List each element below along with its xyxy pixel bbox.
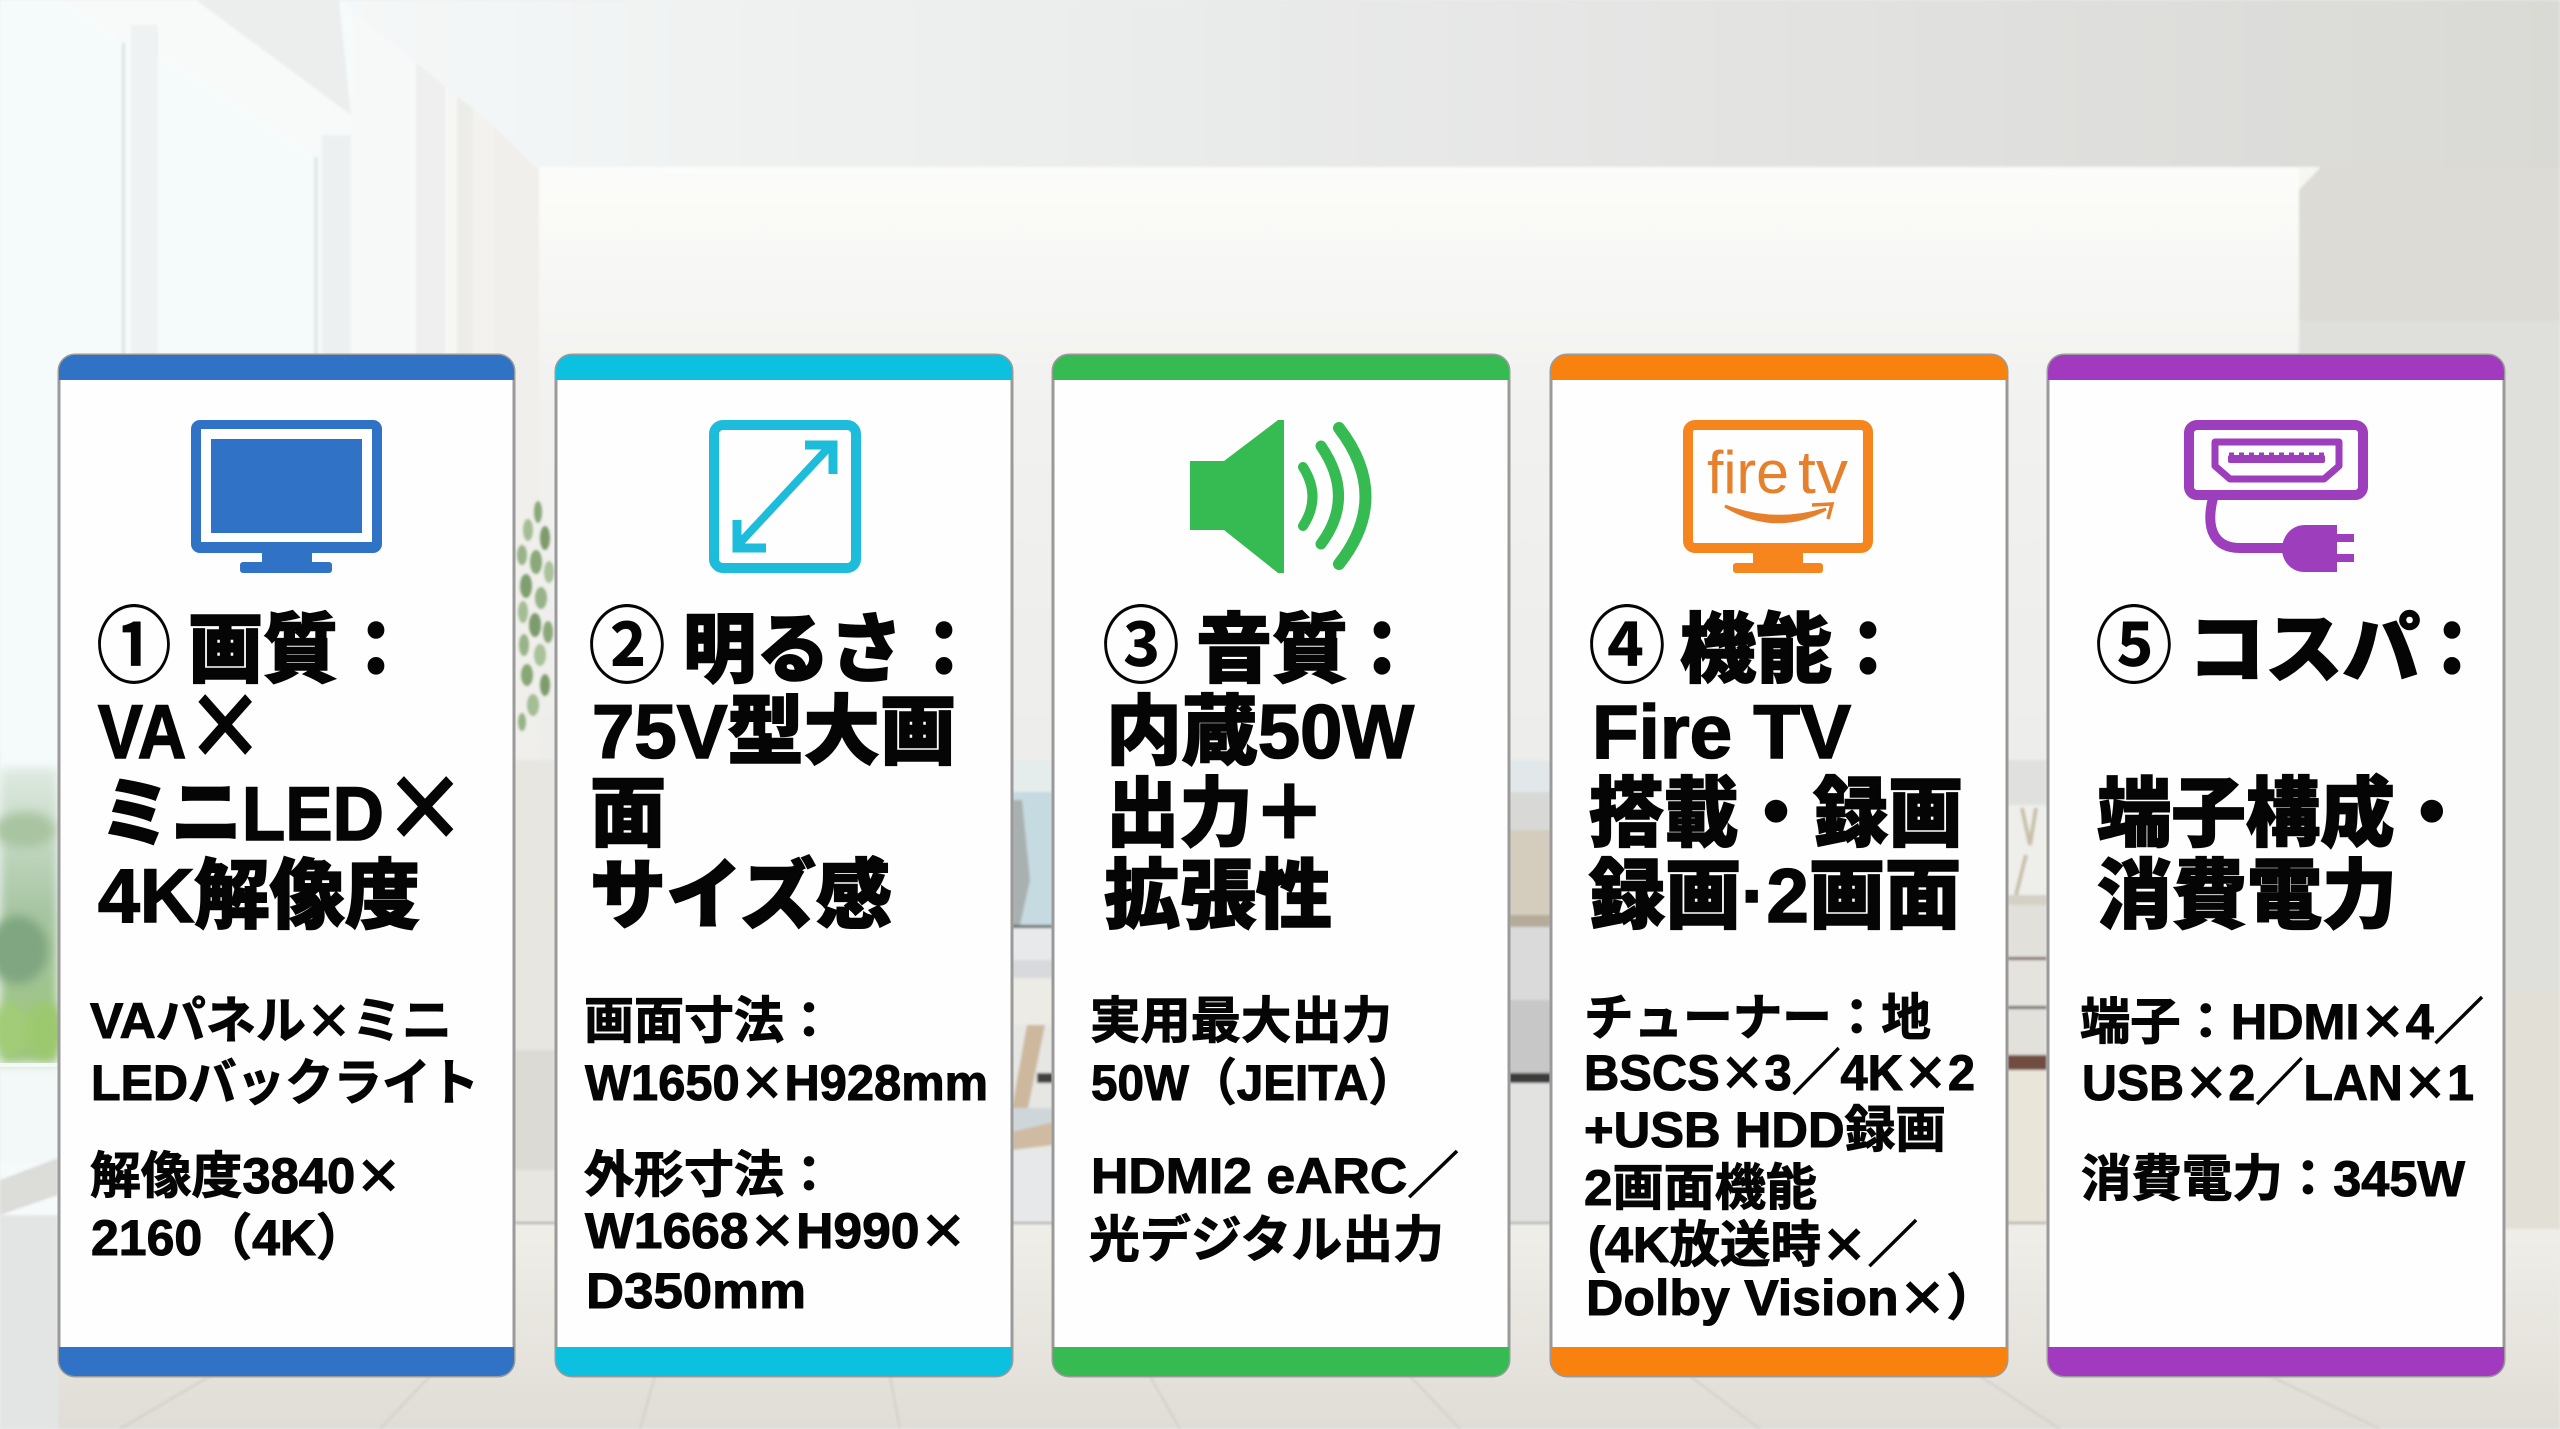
heading [588, 600, 980, 939]
header bar [1551, 355, 2007, 380]
heading: サイズ感 [590, 854, 892, 939]
icon: hdmi port and plug [2189, 425, 2363, 572]
footer bar [59, 1347, 514, 1376]
heading: 機能 [1680, 608, 1832, 693]
heading: 端子構成・ [2097, 772, 2469, 857]
body text [1584, 990, 1998, 1329]
icon: fire tv monitor [1688, 425, 1868, 573]
heading: 拡張性 [1104, 854, 1332, 939]
body text [584, 993, 988, 1319]
body text: Dolby Vision×） [1586, 1263, 1998, 1329]
heading: コスパ [2188, 608, 2420, 693]
body text: HDMI2 eARC／ [1091, 1148, 1459, 1204]
heading: 内蔵50W [1106, 690, 1414, 775]
heading: 音質 [1196, 608, 1348, 693]
heading: 明るさ [683, 608, 903, 693]
heading: VA× [98, 657, 264, 784]
body text: VAパネル×ミニ [90, 986, 452, 1052]
panel: 5 value [2048, 355, 2504, 1376]
panel: 2 brightness [556, 355, 1012, 1376]
heading: 75V型大画 [592, 690, 956, 775]
heading: ミニLED× [100, 739, 466, 866]
header bar [2048, 355, 2504, 380]
body text: 2160（4K） [91, 1210, 366, 1266]
body text [1089, 993, 1459, 1268]
heading: ： [2416, 608, 2488, 693]
heading: 4K解像度 [98, 854, 420, 939]
tree outside the window [0, 768, 65, 1067]
panel: 4 features [1551, 355, 2007, 1376]
body text: 2画面機能 [1584, 1160, 1817, 1216]
header bar [556, 355, 1012, 380]
body text: D350mm [586, 1263, 806, 1319]
heading: ： [1832, 608, 1904, 693]
body text: W1650×H928mm [585, 1048, 988, 1114]
footer bar [2048, 1347, 2504, 1376]
heading [1102, 600, 1418, 939]
heading: ② [588, 600, 666, 694]
panel: 3 sound [1053, 355, 1509, 1376]
body text: LEDバックライト [91, 1055, 479, 1111]
body text: 消費電力：345W [2081, 1151, 2466, 1207]
heading: 消費電力 [2097, 854, 2397, 939]
body text: 画面寸法： [584, 993, 834, 1049]
body text: W1668×H990× [585, 1196, 967, 1262]
heading [96, 600, 466, 939]
icon: fire tv monitor: tv [1798, 439, 1848, 506]
heading: ③ [1102, 600, 1180, 694]
body text [2080, 987, 2484, 1207]
heading: 録画·2画面 [1589, 854, 1961, 939]
body text: (4K放送時×／ [1588, 1210, 1918, 1276]
heading: ④ [1588, 600, 1666, 694]
footer bar [556, 1347, 1012, 1376]
body text: 外形寸法： [584, 1147, 834, 1203]
body text: BSCS×3／4K×2 [1584, 1038, 1975, 1104]
icon: fire tv monitor: fire [1707, 439, 1789, 506]
panel: 1 picture quality [59, 355, 514, 1376]
heading: ⑤ [2095, 600, 2173, 694]
icon: monitor [191, 420, 382, 573]
body text: 端子：HDMI×4／ [2080, 987, 2484, 1053]
icon: diagonal size arrow [714, 425, 856, 568]
body text: 光デジタル出力 [1089, 1212, 1444, 1268]
footer bar [1551, 1347, 2007, 1376]
heading: ： [1346, 608, 1418, 693]
icon: speaker [1190, 420, 1366, 573]
heading: Fire TV [1592, 690, 1851, 775]
heading: ： [908, 608, 980, 693]
heading: ： [340, 608, 412, 693]
body text: 解像度3840× [90, 1141, 402, 1207]
plant between cards 1 and 2 [517, 501, 554, 731]
body text: 実用最大出力 [1090, 993, 1392, 1049]
body text: 50W（JEITA） [1091, 1055, 1416, 1111]
heading: ① [96, 600, 172, 694]
footer bar [1053, 1347, 1509, 1376]
body text: +USB HDD録画 [1584, 1102, 1946, 1158]
heading [1588, 600, 1963, 939]
body text [90, 986, 479, 1266]
header bar [1053, 355, 1509, 380]
heading: 出力＋ [1106, 772, 1326, 857]
heading [2095, 600, 2488, 939]
heading: 画質 [188, 608, 338, 693]
header bar [59, 355, 514, 380]
body text: チューナー：地 [1584, 990, 1931, 1046]
body text: USB×2／LAN×1 [2082, 1048, 2474, 1114]
heading: 面 [590, 772, 666, 857]
heading: 搭載・録画 [1589, 772, 1963, 857]
